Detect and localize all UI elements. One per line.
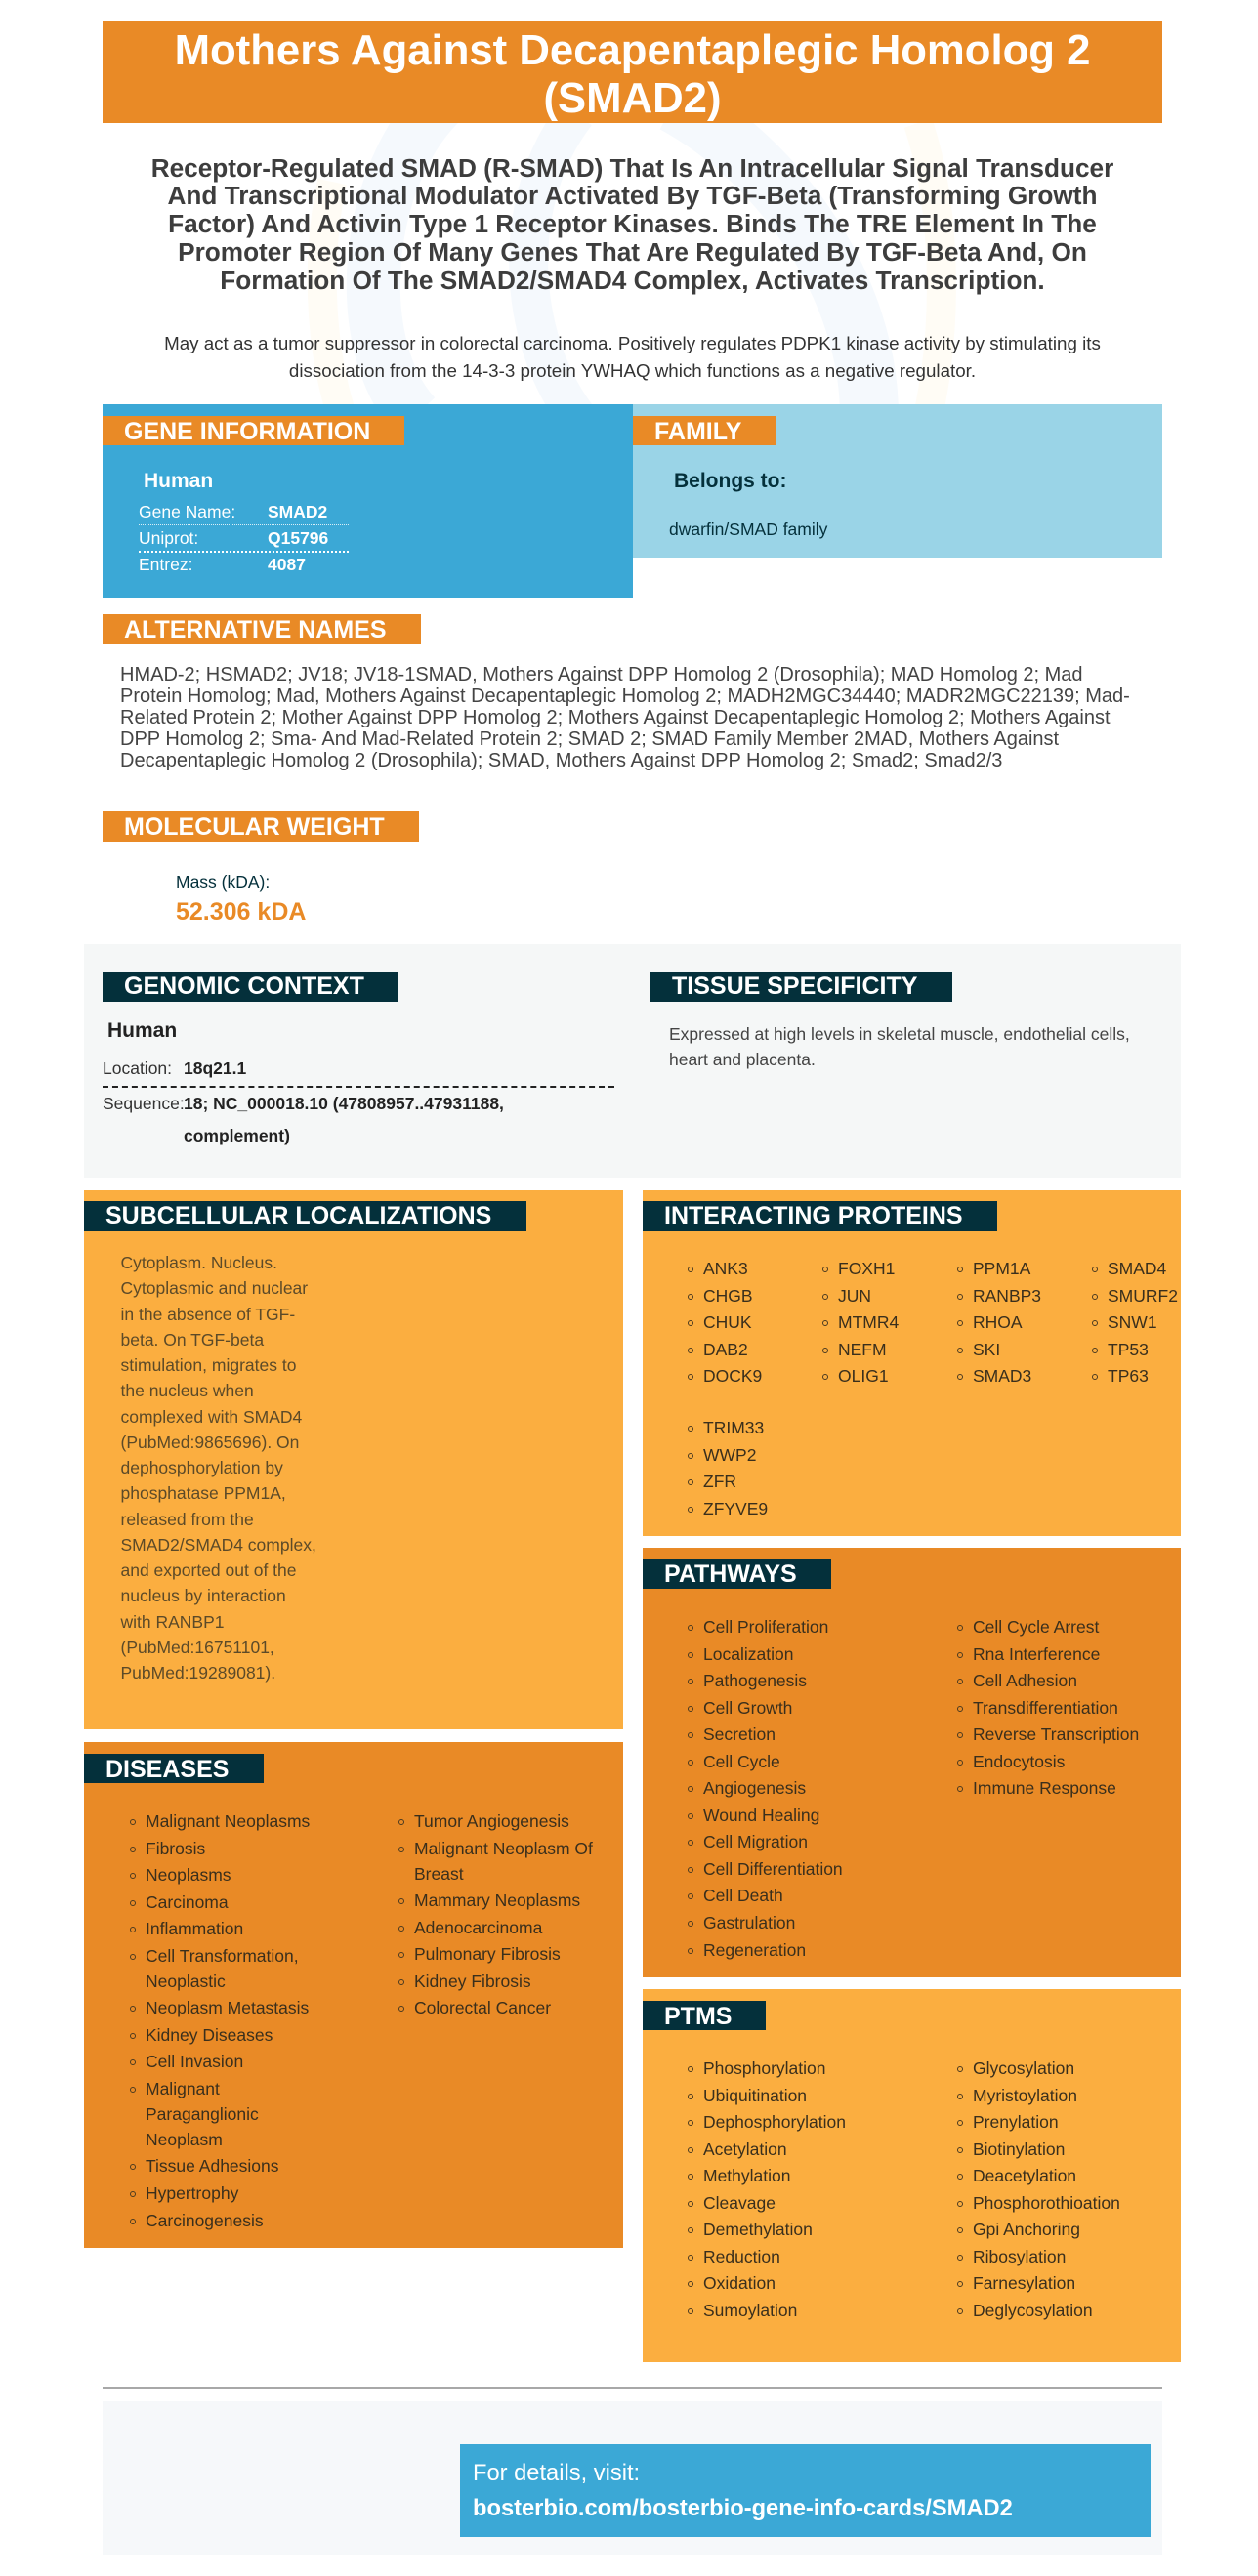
protein list: TRIM33: [703, 1418, 764, 1437]
disease list: Neoplasm Metastasis: [146, 1998, 309, 2017]
gene fields: Entrez:: [139, 555, 192, 574]
sequence row: [103, 1094, 504, 1145]
pathway list: Immune Response: [973, 1778, 1116, 1798]
panel: PTMs: [643, 1989, 1181, 2362]
subtitle summary: Factor) And Activin Type 1 Receptor Kinases. Binds The TRE Element In The: [168, 209, 1097, 238]
heading: PTMs: PTMS: [664, 2003, 732, 2030]
tissue specificity text: heart and placenta.: [669, 1050, 816, 1069]
protein list: MTMR4: [838, 1312, 899, 1332]
pathway list: Secretion: [703, 1724, 776, 1744]
disease list: Kidney Diseases: [146, 2025, 273, 2045]
background watermark logo: [308, 123, 956, 404]
PTM list: Dephosphorylation: [703, 2112, 846, 2132]
pathway list: Wound Healing: [703, 1806, 819, 1825]
disease list: Adenocarcinoma: [414, 1918, 542, 1937]
description text: [164, 333, 1101, 381]
title banner: (SMAD2): [543, 74, 722, 122]
panel: diseases: [84, 1742, 623, 2248]
disease list: Mammary Neoplasms: [414, 1890, 580, 1910]
disease list: Fibrosis: [146, 1839, 205, 1858]
pathway list: Transdifferentiation: [973, 1698, 1118, 1718]
pathway list: Cell Growth: [703, 1698, 792, 1718]
heading: family: FAMILY: [654, 418, 741, 445]
localization text: beta. On TGF-beta: [121, 1330, 264, 1350]
localization text: the nucleus when: [121, 1381, 254, 1400]
location row: [103, 1059, 614, 1088]
alternative names text: Protein Homolog; Mad, Mothers Against Decapentaplegic Homolog 2; MADH2MGC34440; MADR2MGC22139; Mad-: [120, 686, 1130, 707]
species label: Human: [107, 1019, 177, 1042]
callout: details link: bosterbio.com/bosterbio-gene-info-cards/SMAD2: [473, 2496, 1013, 2521]
localization text: dephosphorylation by: [121, 1458, 283, 1477]
localization text: stimulation, migrates to: [121, 1355, 296, 1375]
panel: interacting proteins: [643, 1190, 1181, 1536]
panel: family: [633, 404, 1162, 558]
heading: genomic context: GENOMIC CONTEXT: [124, 973, 364, 1000]
disease list: Malignant: [146, 2079, 220, 2098]
disease list: Neoplastic: [146, 1972, 226, 1991]
heading: interacting proteins: INTERACTING PROTEINS: [664, 1202, 963, 1229]
heading: gene information: GENE INFORMATION: [124, 418, 370, 445]
heading: PTMs: [643, 2001, 766, 2030]
protein list: SKI: [973, 1340, 1000, 1359]
disease list: Kidney Fibrosis: [414, 1972, 531, 1991]
heading: alternative names: ALTERNATIVE NAMES: [124, 616, 387, 644]
disease list: Malignant Neoplasms: [146, 1811, 310, 1831]
alternative names text: Decapentaplegic Homolog 2 (Drosophila); SMAD, Mothers Against DPP Homolog 2; Smad2; Smad2/3: [120, 750, 1002, 771]
PTM list: Methylation: [703, 2166, 791, 2185]
PTM list: Reduction: [703, 2247, 780, 2266]
protein list: JUN: [838, 1286, 871, 1306]
sequence row: complement): [184, 1126, 290, 1145]
localization text: Cytoplasmic and nuclear: [121, 1278, 308, 1298]
PTM list: Gpi Anchoring: [973, 2220, 1080, 2239]
PTM list: Deglycosylation: [973, 2301, 1093, 2320]
title banner: Mothers Against Decapentaplegic Homolog 2: [175, 26, 1090, 74]
PTM list: Demethylation: [703, 2220, 813, 2239]
localization text: PubMed:19289081).: [121, 1663, 275, 1683]
mass label: Mass (kDA):: [176, 872, 270, 892]
localization text: and exported out of the: [121, 1560, 297, 1580]
disease list: Carcinoma: [146, 1892, 229, 1912]
PTM list: Farnesylation: [973, 2273, 1075, 2293]
heading: molecular weight: MOLECULAR WEIGHT: [124, 813, 385, 841]
sequence row: 18; NC_000018.10 (47808957..47931188,: [184, 1094, 504, 1113]
protein list: RHOA: [973, 1312, 1023, 1332]
heading: subcellular localizations: SUBCELLULAR LOCALIZATIONS: [105, 1202, 491, 1229]
disease list: Cell Transformation,: [146, 1946, 299, 1966]
PTM list: Ubiquitination: [703, 2086, 807, 2105]
localization text: (PubMed:9865696). On: [121, 1433, 299, 1452]
alternative names text: [120, 664, 1130, 771]
pathway list: [688, 1617, 1139, 1960]
PTM list: Phosphorothioation: [973, 2193, 1120, 2213]
alternative names text: DPP Homolog 2; Sma- And Mad-Related Protein 2; SMAD 2; SMAD Family Member 2MAD, Mothers Against: [120, 728, 1059, 750]
disease list: Pulmonary Fibrosis: [414, 1944, 561, 1964]
pathway list: Pathogenesis: [703, 1671, 807, 1690]
PTM list: Phosphorylation: [703, 2058, 826, 2078]
alternative names text: HMAD-2; HSMAD2; JV18; JV18-1SMAD, Mothers Against DPP Homolog 2 (Drosophila); MAD Homolog 2; Mad: [120, 664, 1083, 686]
gene fields: [139, 502, 349, 574]
mass value: 52.306 kDA: [176, 898, 306, 926]
protein list: SMURF2: [1108, 1286, 1178, 1306]
panel: subcellular localizations: [84, 1190, 623, 1729]
PTM list: Sumoylation: [703, 2301, 797, 2320]
localization text: (PubMed:16751101,: [121, 1638, 274, 1657]
PTM list: Prenylation: [973, 2112, 1059, 2132]
PTM list: Glycosylation: [973, 2058, 1074, 2078]
disease list: Tumor Angiogenesis: [414, 1811, 569, 1831]
disease list: Neoplasm: [146, 2130, 223, 2149]
pathway list: Cell Cycle: [703, 1752, 780, 1771]
pathway list: Cell Cycle Arrest: [973, 1617, 1099, 1637]
gene fields: SMAD2: [268, 502, 327, 521]
pathway list: Cell Migration: [703, 1832, 808, 1851]
disease list: Carcinogenesis: [146, 2211, 264, 2230]
pathway list: Cell Adhesion: [973, 1671, 1077, 1690]
protein list: TP53: [1108, 1340, 1149, 1359]
PTM list: [688, 2058, 1120, 2320]
species label: Human: [144, 470, 213, 492]
protein list: SMAD4: [1108, 1259, 1166, 1278]
localization text: nucleus by interaction: [121, 1586, 286, 1605]
pathway list: Cell Death: [703, 1886, 783, 1905]
panel: footer: [103, 2401, 1162, 2555]
sequence row: Sequence:: [103, 1094, 185, 1113]
PTM list: Deacetylation: [973, 2166, 1076, 2185]
disease list: Neoplasms: [146, 1865, 231, 1885]
title banner: [103, 21, 1162, 123]
panel: pathways: [643, 1548, 1181, 1977]
disease list: Tissue Adhesions: [146, 2156, 279, 2176]
protein list: TP63: [1108, 1366, 1149, 1386]
protein list: SNW1: [1108, 1312, 1157, 1332]
protein list: [688, 1259, 1178, 1518]
pathway list: Endocytosis: [973, 1752, 1065, 1771]
localization text: with RANBP1: [121, 1611, 225, 1631]
localization text: in the absence of TGF-: [121, 1305, 295, 1324]
pathway list: Cell Proliferation: [703, 1617, 828, 1637]
gene fields: 4087: [268, 555, 306, 574]
disease list: Colorectal Cancer: [414, 1998, 551, 2017]
disease list: Hypertrophy: [146, 2183, 238, 2203]
callout: details link: [460, 2444, 1151, 2537]
location row: 18q21.1: [184, 1059, 246, 1078]
localization text: [121, 1253, 316, 1683]
protein list: DAB2: [703, 1340, 748, 1359]
callout: details link: For details, visit:: [473, 2461, 640, 2486]
subtitle summary: And Transcriptional Modulator Activated By TGF-Beta (Transforming Growth: [167, 181, 1098, 210]
alternative names text: Related Protein 2; Mother Against DPP Homolog 2; Mothers Against Decapentaplegic Homolog 2; Mothers Against: [120, 707, 1111, 728]
protein list: PPM1A: [973, 1259, 1030, 1278]
heading: pathways: [643, 1559, 831, 1589]
localization text: complexed with SMAD4: [121, 1406, 302, 1426]
pathway list: Regeneration: [703, 1940, 806, 1960]
localization text: SMAD2/SMAD4 complex,: [121, 1535, 316, 1555]
tissue specificity text: Expressed at high levels in skeletal muscle, endothelial cells,: [669, 1024, 1130, 1044]
disease list: Paraganglionic: [146, 2104, 259, 2124]
pathway list: Cell Differentiation: [703, 1859, 843, 1879]
localization text: Cytoplasm. Nucleus.: [121, 1253, 277, 1272]
heading: diseases: [84, 1754, 264, 1783]
subtitle summary: Receptor-Regulated SMAD (R-SMAD) That Is An Intracellular Signal Transducer: [151, 153, 1113, 183]
protein list: ZFYVE9: [703, 1499, 768, 1518]
PTM list: Acetylation: [703, 2140, 787, 2159]
heading: tissue specificity: TISSUE SPECIFICITY: [672, 973, 917, 1000]
PTM list: Cleavage: [703, 2193, 776, 2213]
pathway list: Gastrulation: [703, 1913, 795, 1932]
localization text: released from the: [121, 1510, 254, 1529]
protein list: CHGB: [703, 1286, 753, 1306]
localization text: phosphatase PPM1A,: [121, 1483, 286, 1503]
protein list: WWP2: [703, 1445, 756, 1465]
location row: Location:: [103, 1059, 172, 1078]
heading: pathways: PATHWAYS: [664, 1560, 797, 1588]
PTM list: Oxidation: [703, 2273, 776, 2293]
protein list: OLIG1: [838, 1366, 889, 1386]
PTM list: Biotinylation: [973, 2140, 1065, 2159]
protein list: ZFR: [703, 1472, 736, 1491]
disease list: Breast: [414, 1864, 464, 1884]
panel: genomic context and tissue specificity: [84, 944, 1181, 1178]
heading: family: [633, 416, 776, 445]
disease list: [130, 1811, 593, 2230]
protein list: FOXH1: [838, 1259, 895, 1278]
protein list: RANBP3: [973, 1286, 1041, 1306]
gene fields: Gene Name:: [139, 502, 235, 521]
subtitle summary: Formation Of The SMAD2/SMAD4 Complex, Activates Transcription.: [220, 266, 1045, 295]
family value: dwarfin/SMAD family: [669, 519, 827, 539]
gene fields: Uniprot:: [139, 528, 198, 548]
disease list: Malignant Neoplasm Of: [414, 1839, 593, 1858]
protein list: SMAD3: [973, 1366, 1031, 1386]
description text: May act as a tumor suppressor in colorectal carcinoma. Positively regulates PDPK1 kinase activity by stimulating its: [164, 333, 1101, 353]
PTM list: Myristoylation: [973, 2086, 1077, 2105]
subtitle summary: Promoter Region Of Many Genes That Are Regulated By TGF-Beta And, On: [178, 237, 1087, 267]
tissue specificity text: [669, 1024, 1130, 1069]
protein list: NEFM: [838, 1340, 887, 1359]
protein list: CHUK: [703, 1312, 752, 1332]
pathway list: Angiogenesis: [703, 1778, 806, 1798]
PTM list: Ribosylation: [973, 2247, 1066, 2266]
heading: diseases: DISEASES: [105, 1756, 229, 1783]
pathway list: Reverse Transcription: [973, 1724, 1139, 1744]
subtitle summary: [151, 153, 1113, 295]
pathway list: Rna Interference: [973, 1644, 1100, 1664]
pathway list: Localization: [703, 1644, 793, 1664]
belongs to label: Belongs to:: [674, 470, 787, 492]
protein list: DOCK9: [703, 1366, 762, 1386]
disease list: Inflammation: [146, 1919, 243, 1938]
disease list: Cell Invasion: [146, 2052, 243, 2071]
gene fields: Q15796: [268, 528, 328, 548]
protein list: ANK3: [703, 1259, 748, 1278]
panel: gene information: [103, 404, 633, 598]
description text: dissociation from the 14-3-3 protein YWHAQ which functions as a negative regulator.: [289, 360, 976, 381]
